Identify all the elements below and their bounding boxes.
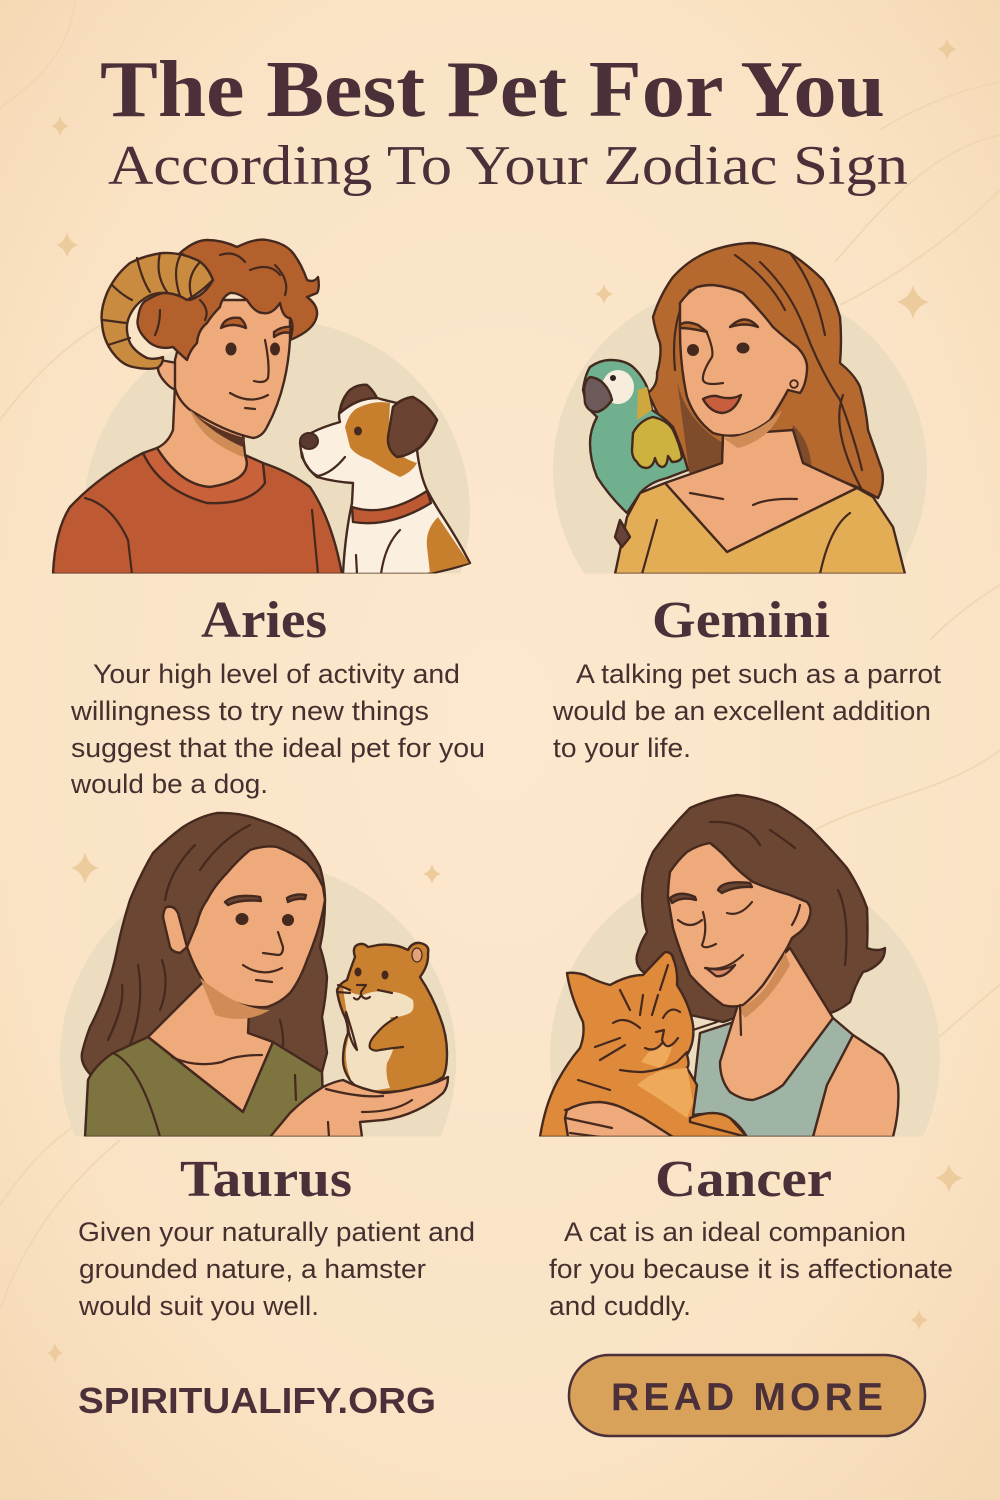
text: Taurus: Given your naturally patient and [78,1217,475,1247]
title: According To Your Zodiac Sign [108,135,908,197]
text: Aries: willingness to try new things [70,696,429,726]
panel: Taurus [60,813,475,1321]
text: Aries: suggest that the ideal pet for you [71,733,485,763]
text: Taurus: grounded nature, a hamster [79,1254,426,1284]
title: The Best Pet For You [100,46,885,134]
text: Gemini: to your life. [553,733,691,763]
button: read more [569,1355,925,1436]
text: Taurus: would suit you well. [78,1291,319,1321]
panel: Cancer [540,795,953,1321]
button: read more: READ MORE [611,1376,887,1419]
text: Aries: Your high level of activity and [93,659,460,689]
panel: Gemini [552,243,942,763]
text: Gemini [552,659,942,763]
illustration: Taurus person with hamster [60,812,456,1136]
text: Aries [70,659,485,799]
website label: SPIRITUALIFY.ORG [78,1380,436,1421]
heading: Aries: Aries [201,592,327,649]
illustration: Aries person with dog [52,238,472,574]
title [100,46,908,197]
heading: Gemini: Gemini [652,592,830,649]
text: Taurus [78,1217,475,1321]
text: Gemini: would be an excellent addition [552,696,931,726]
illustration: Gemini person with parrot [553,242,927,574]
panel: Aries [53,240,485,799]
text: Cancer: A cat is an ideal companion [564,1217,906,1247]
text: Cancer: and cuddly. [549,1291,691,1321]
heading: Cancer: Cancer [655,1151,832,1208]
text: Cancer [549,1217,953,1321]
illustration: Cancer person with cat [538,794,940,1136]
text: Gemini: A talking pet such as a parrot [576,659,942,689]
text: Aries: would be a dog. [70,769,268,799]
text: Cancer: for you because it is affectionate [549,1254,953,1284]
heading: Taurus: Taurus [180,1151,352,1208]
